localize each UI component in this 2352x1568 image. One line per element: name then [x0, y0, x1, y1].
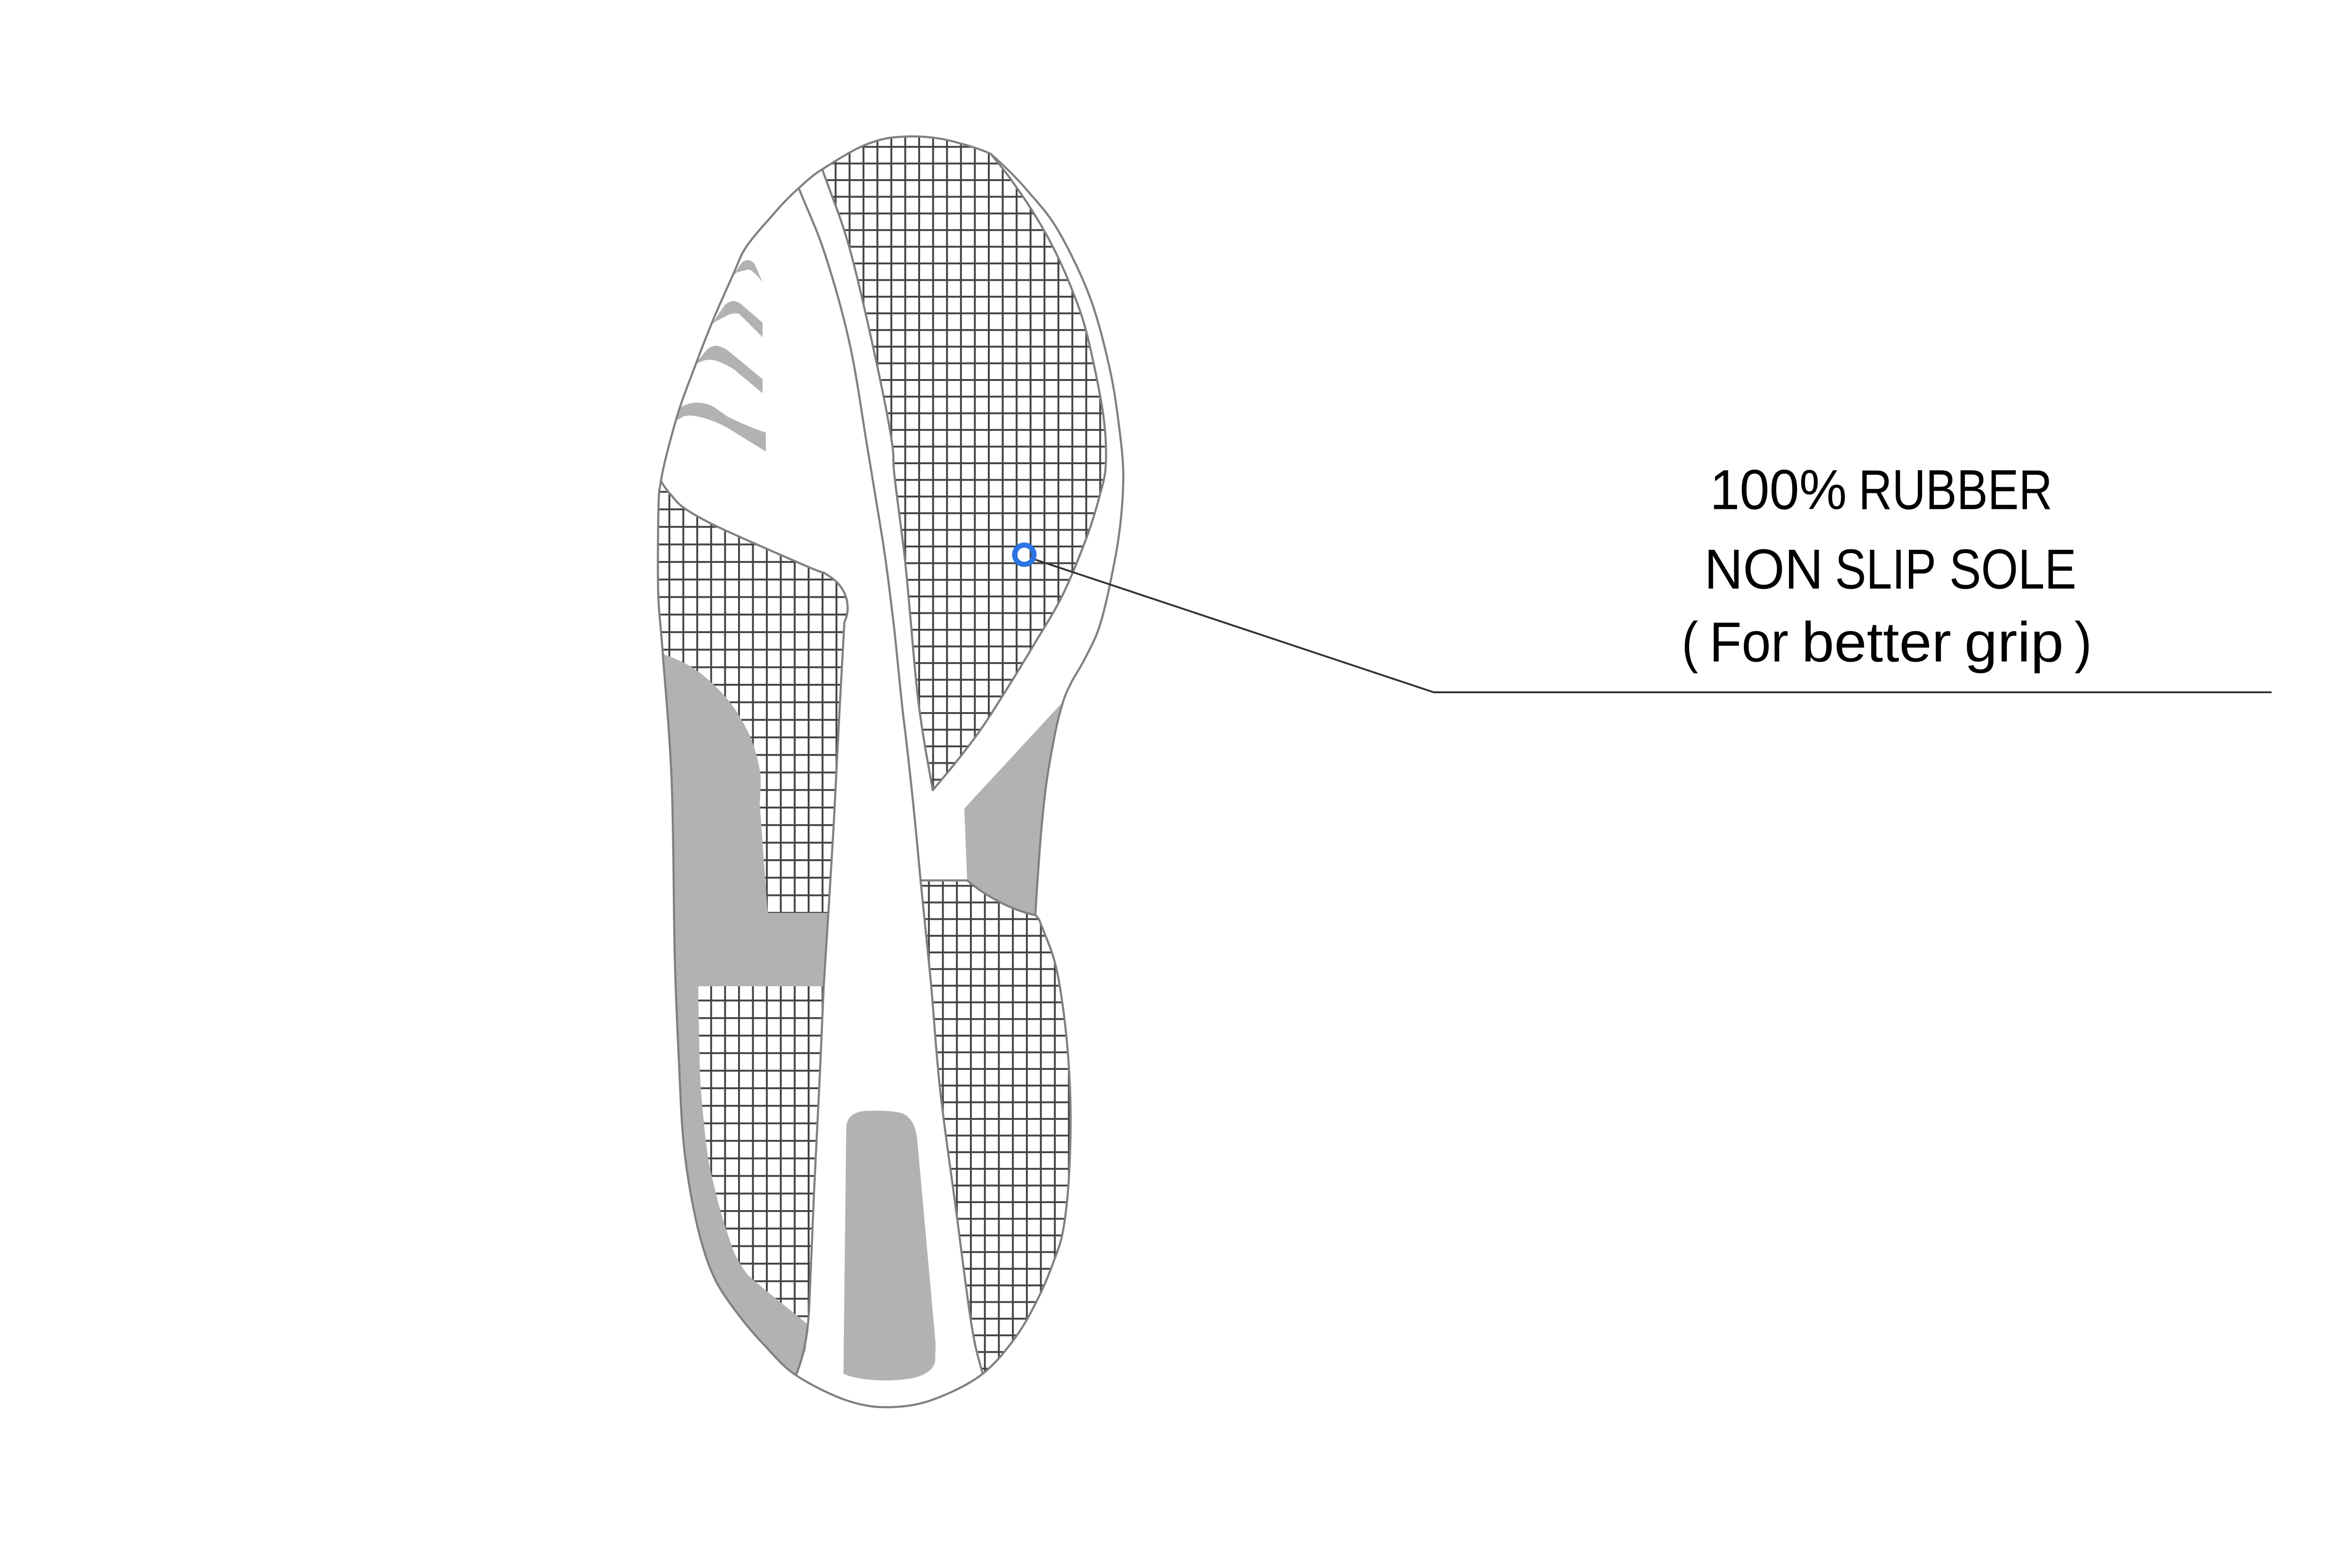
label line: for better grip: ) — [2074, 610, 2092, 673]
infographic: shoe sole with callout — [657, 135, 2272, 1408]
callout marker ring — [1015, 545, 1034, 564]
mesh: outer side grip pattern — [668, 491, 861, 1378]
label line: NON SLIP SOLE: SLIP — [1835, 538, 1936, 601]
grey pad: arch — [964, 704, 1061, 914]
label line: for better grip: grip — [1964, 610, 2064, 673]
callout leader line — [1033, 559, 2272, 692]
label line: for better grip: ( — [1682, 610, 1698, 673]
label line: for better grip: For — [1709, 610, 1788, 673]
sole outlines — [658, 136, 1123, 1407]
grey pad: heel — [843, 1111, 936, 1380]
mesh: heel grip pattern — [922, 881, 1070, 1371]
label line: 100% RUBBER — [1710, 458, 2052, 521]
label line: 100% RUBBER: 100% — [1710, 458, 1847, 521]
toe traction marks — [675, 260, 766, 451]
label line: NON SLIP SOLE — [1704, 538, 2076, 601]
mesh fills and grey pads clipped to the sole — [635, 146, 1129, 1378]
label line: for better grip — [1682, 610, 2092, 673]
callout text — [1682, 458, 2092, 673]
sole base — [658, 136, 1123, 1407]
label line: NON SLIP SOLE: SOLE — [1949, 538, 2076, 601]
grey pad: outer edge — [664, 655, 827, 1373]
label line: NON SLIP SOLE: NON — [1704, 538, 1823, 601]
mesh: forefoot grip pattern — [834, 146, 1129, 800]
label line: 100% RUBBER: RUBBER — [1859, 458, 2052, 521]
shoe sole — [635, 136, 1129, 1407]
label line: for better grip: better — [1802, 610, 1951, 673]
